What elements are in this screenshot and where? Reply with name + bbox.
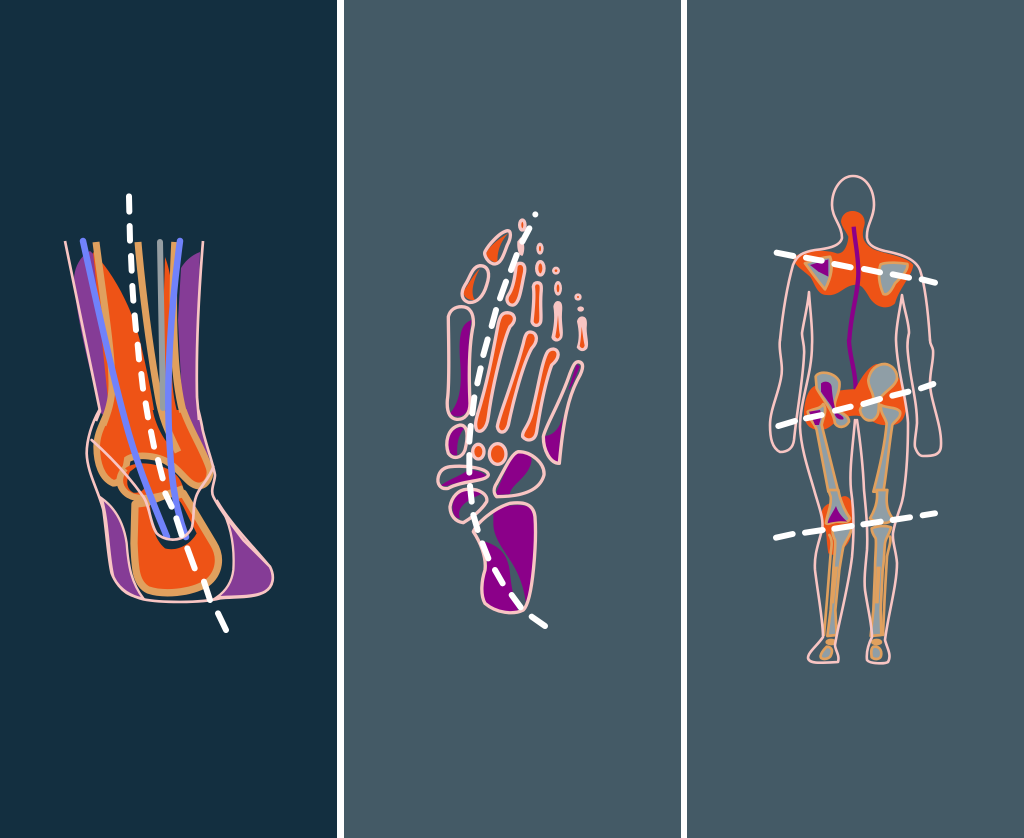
left scapula [805,257,832,289]
medial cuneiform [447,425,467,457]
tendon: tan right [173,242,183,412]
left ilium purple [821,382,844,420]
left femur lower [826,490,850,524]
flat tarsal purple [440,469,487,486]
first metatarsal purple [450,320,472,416]
leg muscle: orange left [93,252,157,470]
left femur head purple [809,410,822,425]
joint gap [153,410,175,452]
great toe distal phalanx [485,231,510,264]
forefoot bones [447,220,588,463]
leg muscle: orange right sliver [160,257,190,450]
right ilium [860,364,897,420]
hip dashed line [778,384,933,426]
pelvis pain area [804,364,906,430]
pocket behind heel [150,497,197,549]
fifth metatarsal [543,362,583,463]
calcaneus purple upper [493,505,534,603]
shoulder pain area [793,211,913,307]
knee and lower leg bones [821,490,893,659]
right tibia lower core [875,567,881,603]
right foot bone [871,647,881,659]
second metatarsal [476,313,514,431]
alignment dashed lines [776,253,935,538]
great toe proximal orange [463,268,480,300]
fifth metatarsal purple [545,364,580,462]
tendon: tan left [96,242,112,425]
cuboid purple [495,453,532,495]
right scapula [879,263,908,294]
left fibula [824,535,832,635]
fourth toe phalanges [551,267,563,341]
knee dashed line [776,513,935,538]
tendons: blue [83,241,186,537]
foot outline [87,410,273,602]
body outline [770,176,941,663]
third metatarsal [497,332,536,432]
leg outline [65,241,203,421]
right ankle bone [871,639,882,645]
left ilium [816,373,849,427]
great toe distal orange [486,233,508,262]
leg muscle: purple left [74,251,108,420]
second toe phalanges [507,220,525,305]
right femur lower [870,490,893,523]
left tibia lower core [831,567,838,603]
panel: body [687,0,1024,838]
calcaneus bone [134,493,218,593]
great toe proximal phalanx [462,266,489,302]
knee pain area [821,496,853,555]
small round bone [473,444,484,459]
panel: foot [344,0,681,838]
talus bone [120,463,183,500]
right fibula [883,537,890,635]
left foot bone [821,647,832,659]
round bone [489,444,506,464]
cuboid [494,452,544,497]
left tibia [827,526,852,636]
panel: ankle [0,0,337,838]
tendon: grey [160,242,163,408]
tendon: tan centre [138,242,178,452]
spine [849,227,858,340]
first metatarsal [447,307,473,419]
fourth metatarsal [523,349,558,440]
tibia bone [97,410,218,593]
medial cuneiform purple [447,427,465,455]
spine lower [849,340,856,388]
right tibia [871,526,891,636]
third toe phalanges [532,243,544,325]
navicular [450,489,487,523]
tarsal bones [438,425,544,613]
calcaneus purple lower [482,542,518,612]
right femur [873,405,900,492]
left femur purple knee [828,506,847,523]
heel fat pads [102,498,273,598]
left ankle bone [825,639,837,645]
flat tarsal [438,466,488,489]
left scapula purple [810,259,828,277]
fifth toe phalanges [574,293,588,351]
left femur [808,404,838,492]
shoulder dashed line [777,253,935,283]
alignment dashed line [469,214,545,626]
leg muscle: purple right [178,252,211,467]
calcaneus [473,503,535,613]
navicular purple [453,490,483,518]
upper body pain and bones [793,211,913,340]
pelvis and femur bones [808,364,900,492]
alignment dashed line [129,196,226,630]
